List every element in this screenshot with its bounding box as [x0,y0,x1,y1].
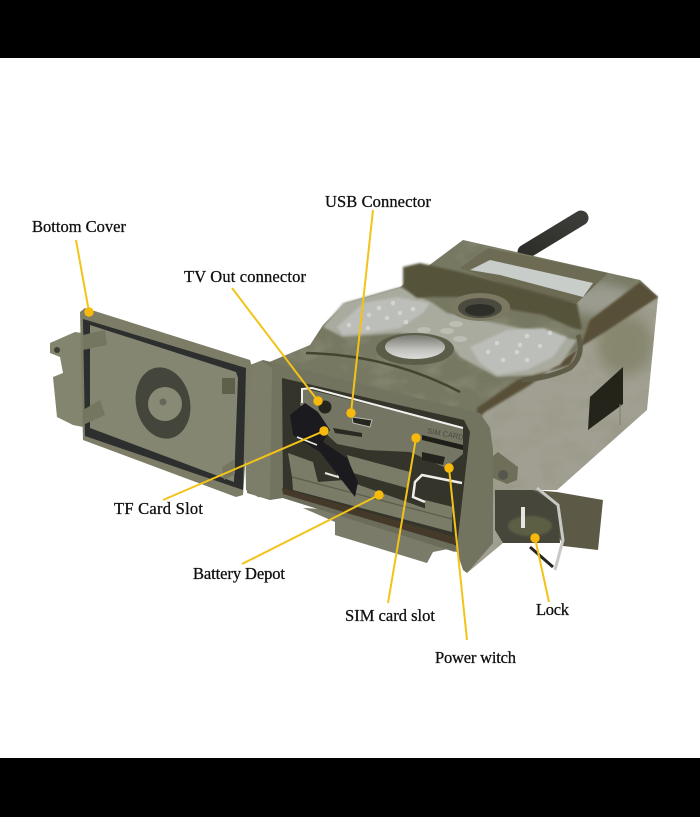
TV jack [318,400,332,414]
callout: Lock: Lock [536,600,570,619]
bottom black bar [0,758,700,817]
callout: Bottom Cover [32,217,126,317]
callout: Battery Depot [193,490,384,583]
hinge strip [244,361,272,498]
callout: Power witch: Power witch [435,648,517,667]
callout: Power witch [435,463,517,667]
ear tab [493,452,518,484]
lower lip [303,508,453,563]
SIM slot [422,435,463,450]
bottom cover [50,308,252,497]
callout: Bottom Cover: Bottom Cover [32,217,126,236]
camera front frame [244,360,518,573]
LCD visor [403,248,608,330]
callout: SIM card slot [345,433,435,625]
camera opening [282,378,470,546]
callout: TF Card Slot [114,426,329,518]
callout: USB Connector [325,192,432,418]
cover dial [129,362,197,444]
ventilation arc [306,353,460,392]
PIR sensor [376,333,454,365]
camera side face [467,290,660,580]
power switch [422,452,445,465]
USB port [352,417,372,427]
IR LED panel [323,287,580,380]
lanyard strap [290,403,358,497]
lock [495,488,603,570]
strap highlight wire [297,437,317,445]
camera lens [450,293,510,321]
circuit panel [300,388,463,468]
callout: SIM card slot: SIM card slot [345,606,435,625]
callout: Battery Depot: Battery Depot [193,564,285,583]
top black bar [0,0,700,58]
antenna [525,218,581,252]
battery depot [282,453,462,563]
callout: TF Card Slot: TF Card Slot [114,499,203,518]
camera illustration [50,218,660,580]
callout: USB Connector: USB Connector [325,192,432,211]
camera top face [250,235,660,420]
callout: Lock [530,533,570,619]
SIM card label: SIM CARD [427,426,465,442]
side window [588,367,623,430]
battery contacts [413,475,462,502]
callout: TV Out connector: TV Out connector [184,267,306,286]
TF slot [333,428,362,437]
white light edge [302,388,463,428]
LED dots [347,301,552,362]
brown edge stripe [477,282,658,420]
callout: TV Out connector [184,267,323,406]
